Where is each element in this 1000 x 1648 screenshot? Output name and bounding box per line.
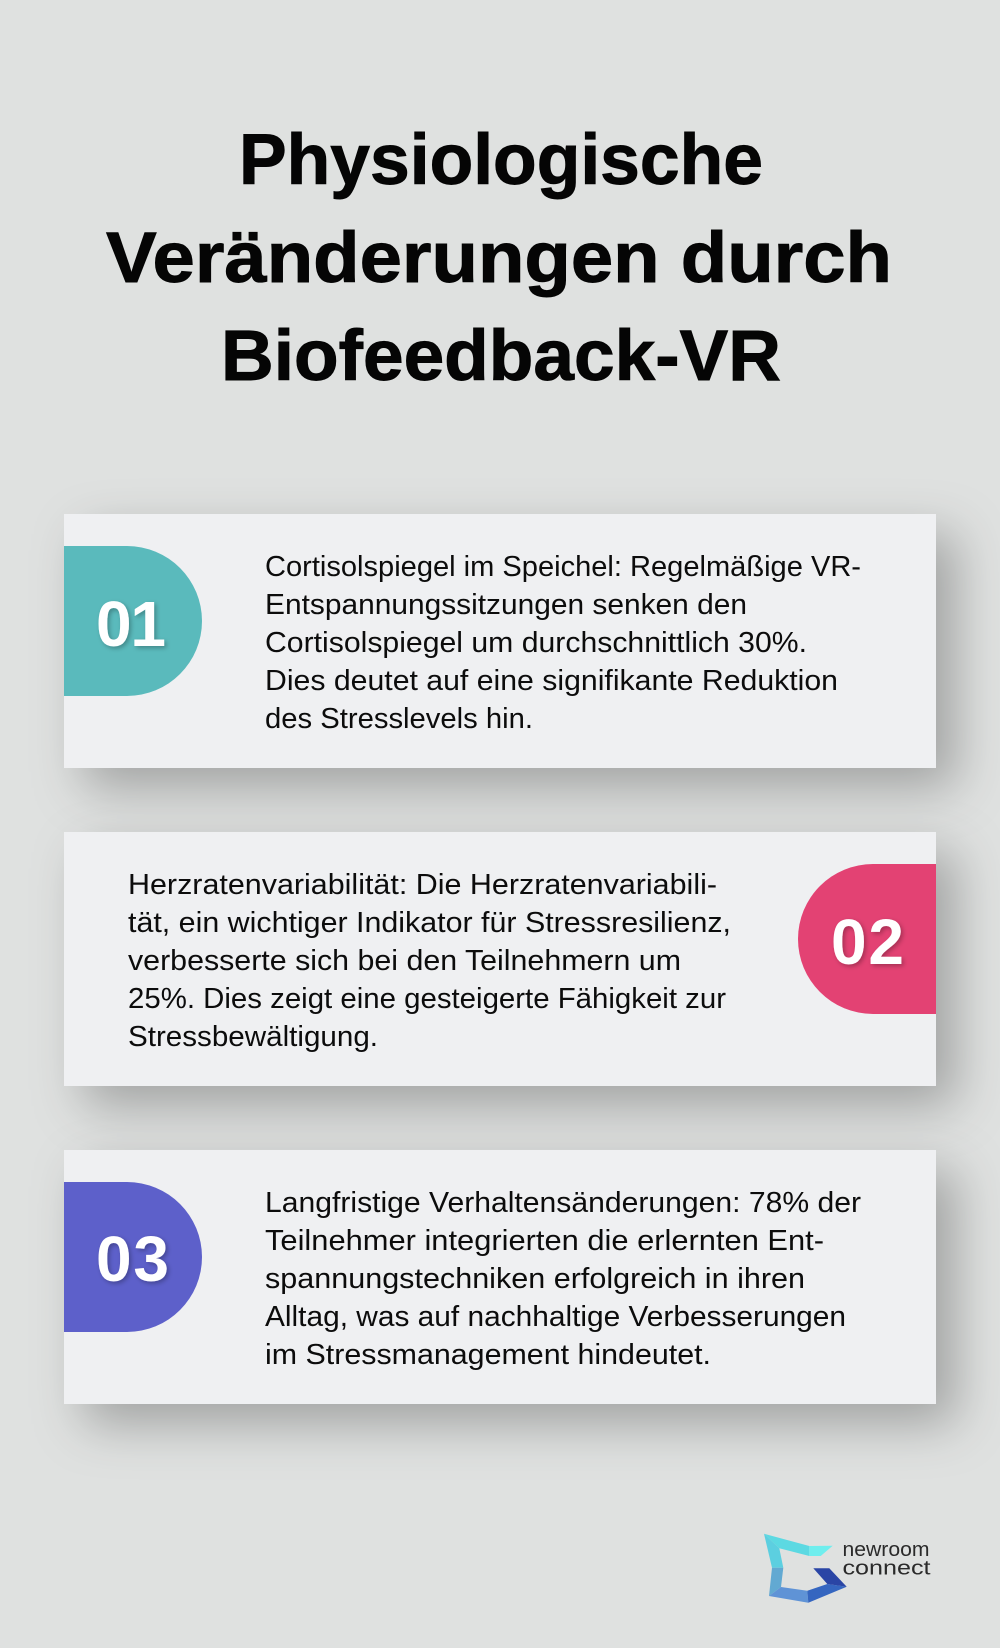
text block 02 [128,869,731,1053]
text block 03: Teilnehmer integrierten die erlernten Ent- [265,1225,824,1257]
text block 03: im Stressmanagement hindeutet. [265,1339,711,1371]
logo wordmark: newroom [842,1539,930,1561]
text block 01: des Stresslevels hin. [265,703,533,735]
text block 01: Cortisolspiegel im Speichel: Regelmäßige VR- [265,551,861,583]
text block 02: tät, ein wichtiger Indikator für Stressresilienz, [128,907,731,939]
text block 02: Stressbewältigung. [128,1021,378,1053]
text block 01: Entspannungssitzungen senken den [265,589,747,621]
title: Veränderungen durch [106,219,892,298]
text block 03: Langfristige Verhaltensänderungen: 78% der [265,1187,862,1219]
logo wordmark [842,1539,931,1580]
logo: newroom connect [764,1534,931,1603]
text block 03 [265,1187,862,1371]
text block 03: spannungstechniken erfolgreich in ihren [265,1263,805,1295]
text block 02: Herzratenvariabilität: Die Herzratenvariabili- [128,869,717,901]
text block 03: Alltag, was auf nachhaltige Verbesserungen [265,1301,846,1333]
card background 01 [64,514,936,768]
icon: logo mark [764,1534,847,1603]
panel: card 03 behaviour change [64,1150,936,1404]
panel: card 02 heart rate variability [64,832,936,1086]
logo wordmark: connect [842,1558,931,1580]
text block 02: 25%. Dies zeigt eine gesteigerte Fähigkeit zur [128,983,727,1015]
text block 01: Cortisolspiegel um durchschnittlich 30%. [265,627,807,659]
card background 03 [64,1150,936,1404]
title [106,121,892,396]
text block 01 [265,551,861,735]
title: Physiologische [239,121,763,200]
text block 02: verbesserte sich bei den Teilnehmern um [128,945,681,977]
title: Biofeedback-VR [221,317,781,396]
text block 01: Dies deutet auf eine signifikante Reduktion [265,665,838,697]
number 03: 03 [96,1223,169,1295]
number 01: 01 [96,588,166,660]
card background 02 [64,832,936,1086]
number badge 01 [64,546,202,696]
number 02: 02 [831,906,904,978]
number badge 02 [798,864,936,1014]
panel: card 01 cortisol [64,514,936,768]
number badge 03 [64,1182,202,1332]
